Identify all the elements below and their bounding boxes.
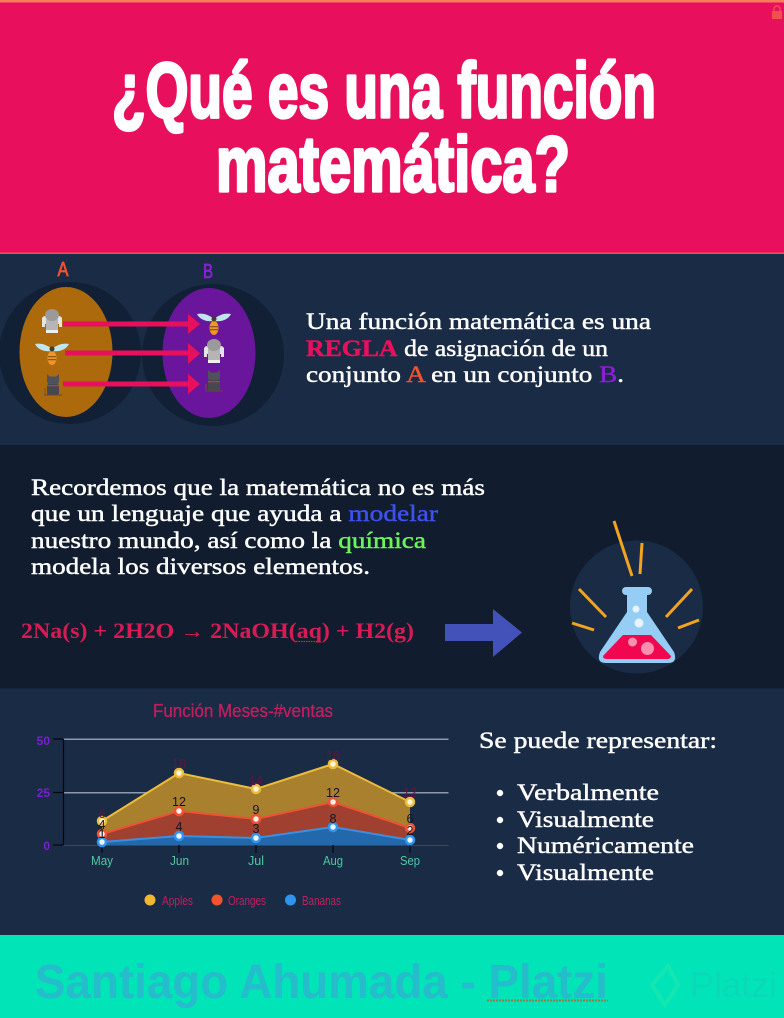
text: author credit: Santiago Ahumada - Platzi (35, 956, 608, 1009)
title (112, 46, 656, 208)
data labels: 12 (172, 795, 186, 809)
icon: robot in A (42, 309, 62, 333)
text: modeling paragraph: nuestro mundo, así como la química (31, 528, 427, 554)
panel: language of mathematics (0, 445, 784, 688)
text: definition: REGLA de asignación de un (306, 336, 608, 362)
x axis labels: Jul (248, 853, 264, 868)
text: forms of representation: Visualmente (517, 860, 654, 886)
text: forms of representation: Numéricamente (517, 833, 694, 859)
data labels: 3 (253, 822, 260, 836)
icon: lock (772, 6, 782, 19)
text: forms of representation: Verbalmente (517, 780, 659, 806)
icon: flask (570, 521, 703, 674)
text: modeling paragraph: que un lenguaje que ayuda a modelar (31, 501, 438, 527)
data labels: 6 (407, 812, 414, 826)
icon: cat in A (44, 374, 62, 396)
logo: Platzi watermark (652, 966, 777, 1005)
data labels: 4 (99, 818, 106, 832)
data labels: 2 (407, 824, 414, 838)
data labels: 12 (326, 786, 340, 800)
diagram: sets A and B (0, 259, 284, 426)
title: matemática? (216, 120, 570, 208)
legend: Apples (162, 894, 193, 908)
y axis labels: 0 (43, 839, 50, 853)
data labels: 12 (403, 786, 417, 800)
text: definition: conjunto A en un conjunto B. (306, 362, 624, 388)
arrows: mapping (63, 314, 200, 394)
series: oranges (98, 798, 414, 842)
legend: Oranges (228, 894, 266, 908)
text: forms of representation: Se puede representar: (479, 728, 717, 754)
data labels: 6 (99, 807, 106, 821)
y axis labels (37, 734, 50, 853)
x axis labels: Jun (170, 853, 189, 868)
spellcheck underline: equation (296, 640, 318, 642)
data labels: 1 (99, 827, 106, 841)
label: set B: B (203, 261, 213, 283)
data labels: 8 (330, 812, 337, 826)
text: chemical equation: 2Na(s) + 2H2O → 2NaOH(aq) + H2(g) (21, 618, 414, 643)
y axis labels: 25 (37, 786, 50, 800)
text: forms of representation: Visualmente (517, 807, 654, 833)
text: modeling paragraph: Recordemos que la matemática no es más (31, 475, 485, 501)
data labels: 16 (326, 749, 340, 763)
data labels: 14 (249, 774, 263, 788)
data labels: 9 (253, 803, 260, 817)
panel: definition (0, 254, 784, 445)
x axis labels: May (91, 853, 113, 868)
data labels: 18 (172, 757, 186, 771)
spellcheck underline (487, 1000, 608, 1002)
panel: title header (0, 0, 784, 254)
panel: footer (0, 935, 784, 1018)
legend (144, 894, 341, 908)
icon: robot in B (204, 339, 224, 363)
chart: area chart of sales by month (37, 700, 448, 908)
arrow (445, 609, 522, 657)
legend: Bananas (302, 894, 341, 908)
text: definition: Una función matemática es una (306, 309, 652, 335)
x axis labels (91, 853, 420, 868)
text: modeling paragraph: modela los diversos elementos. (31, 554, 370, 580)
label: set A: A (58, 259, 69, 281)
text: modeling paragraph (31, 475, 485, 580)
logo: Platzi watermark: Platzi (690, 966, 777, 1005)
y axis labels: 50 (37, 734, 50, 748)
text: definition (306, 309, 652, 388)
icon: bee in B (197, 314, 231, 335)
x axis labels: Aug (323, 853, 343, 868)
x axis labels: Sep (400, 853, 420, 868)
icon: cat in B (205, 370, 223, 392)
icon: bee in A (35, 344, 69, 365)
data labels: 4 (176, 820, 183, 834)
series: apples (98, 760, 414, 834)
panel: representations (0, 688, 784, 936)
data labels (99, 749, 417, 841)
series: bananas (98, 823, 414, 846)
chart title: Función Meses-#ventas (153, 700, 333, 721)
text: forms of representation (479, 728, 717, 886)
